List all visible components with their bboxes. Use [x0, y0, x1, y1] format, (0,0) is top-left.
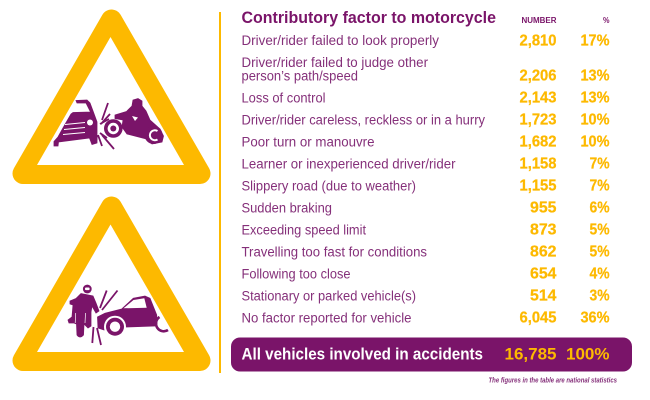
row: stationary: 3% [590, 288, 610, 305]
total bar: All vehicles involved in accidents [242, 346, 483, 364]
row: poor turn: 1,682 [520, 134, 556, 151]
warning sign: car and motorcycle collision [23, 20, 200, 174]
row: following too close: Following too close [242, 267, 350, 282]
total bar [231, 338, 632, 372]
row: failed to judge: 2,206 [520, 68, 557, 84]
row: careless: 10% [580, 112, 610, 129]
row: no factor: 36% [580, 310, 610, 327]
total bar: 100% [566, 344, 610, 364]
row: failed to look [242, 32, 610, 49]
row: exceeding speed limit: Exceeding speed limit [242, 223, 366, 238]
row: no factor: 6,045 [520, 310, 557, 327]
table rows [242, 32, 610, 327]
row: poor turn [242, 134, 610, 151]
row: loss of control: 13% [580, 90, 610, 107]
row: following too close [242, 266, 610, 283]
row: slippery road: Slippery road (due to weather) [242, 179, 416, 194]
footnote: The figures in the table are national statistics [488, 378, 617, 384]
row: learner [242, 156, 610, 173]
row: learner: 7% [590, 156, 610, 173]
row: no factor: No factor reported for vehicle [242, 311, 412, 326]
row: stationary: Stationary or parked vehicle(s) [242, 289, 416, 304]
row: poor turn: 10% [580, 134, 610, 151]
row: exceeding speed limit [242, 222, 610, 239]
row: failed to look: 17% [580, 32, 610, 49]
row: following too close: 654 [530, 266, 557, 283]
vertical divider [219, 12, 221, 373]
row: loss of control: 2,143 [520, 90, 557, 107]
row: too fast [242, 244, 610, 261]
row: too fast: Travelling too fast for conditions [242, 245, 427, 260]
icon: motorcycle and rider [104, 98, 164, 144]
row: poor turn: Poor turn or manouvre [242, 135, 374, 150]
icon: car side view [98, 296, 168, 338]
row: failed to look: 2,810 [520, 32, 556, 49]
row: failed to judge: person’s path/speed [242, 68, 358, 84]
row: failed to look: Driver/rider failed to look properly [242, 33, 439, 48]
row: failed to judge [242, 55, 610, 84]
row: too fast: 862 [530, 244, 556, 261]
row: careless: Driver/rider careless, reckless or in a hurry [242, 113, 485, 128]
warning sign: motorcycle and car collision [23, 207, 200, 360]
row: learner: Learner or inexperienced driver/rider [242, 157, 456, 172]
row: slippery road: 1,155 [520, 178, 557, 195]
row: sudden braking [242, 200, 610, 217]
icon: rider seen from front [68, 285, 99, 337]
icon: impact sparks [96, 103, 114, 149]
row: no factor [242, 310, 610, 327]
row: sudden braking: 955 [530, 200, 557, 217]
row: loss of control: Loss of control [242, 91, 326, 106]
table heading: % [603, 16, 610, 25]
row: sudden braking: 6% [590, 200, 610, 217]
row: careless: 1,723 [520, 112, 557, 129]
row: too fast: 5% [590, 244, 610, 261]
row: sudden braking: Sudden braking [242, 201, 332, 216]
row: learner: 1,158 [520, 156, 557, 173]
row: slippery road: 7% [590, 178, 610, 195]
total bar: 16,785 [504, 344, 556, 364]
row: loss of control [242, 90, 610, 107]
row: exceeding speed limit: 5% [590, 222, 610, 239]
row: careless [242, 112, 610, 129]
row: failed to judge: 13% [580, 68, 610, 84]
row: following too close: 4% [590, 266, 610, 283]
table heading: NUMBER [522, 16, 557, 25]
icon: car front view [54, 100, 97, 146]
row: exceeding speed limit: 873 [530, 222, 557, 239]
row: stationary: 514 [530, 288, 557, 305]
row: stationary [242, 288, 610, 305]
table heading: Contributory factor to motorcycle [242, 8, 496, 27]
row: slippery road [242, 178, 610, 195]
icon: impact sparks [92, 290, 118, 345]
row: failed to judge: Driver/rider failed to judge other [242, 55, 428, 70]
